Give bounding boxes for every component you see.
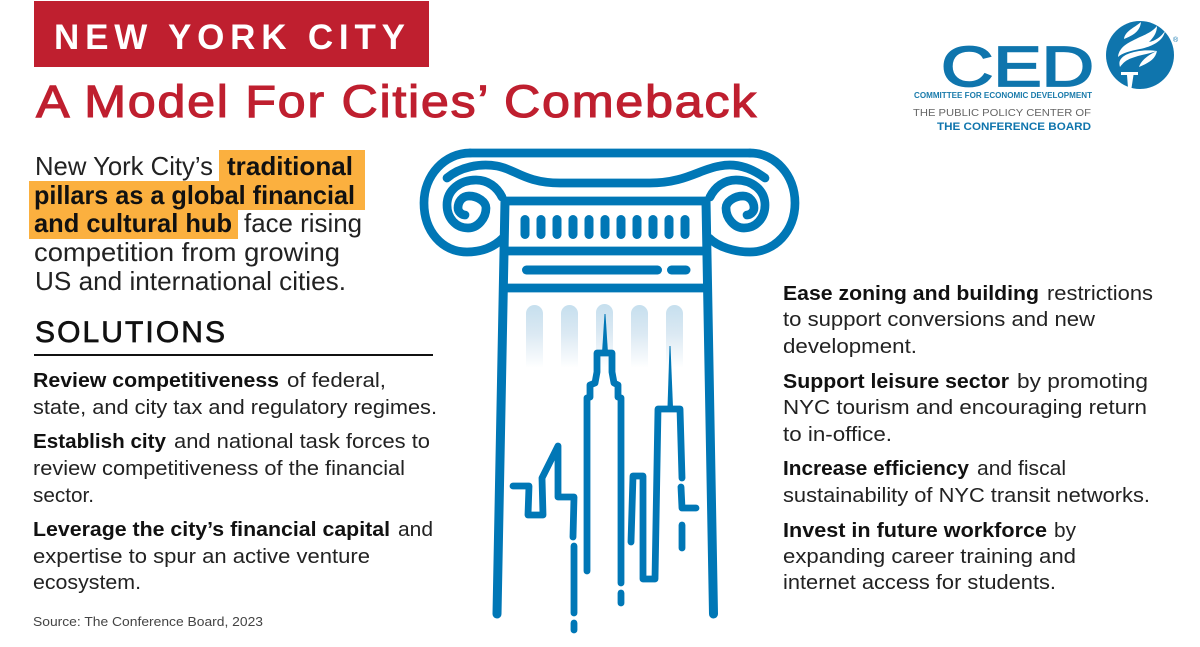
solution: review competitiveness: Review competitiveness	[33, 369, 279, 392]
icon: torch emblem	[1106, 21, 1174, 89]
title banner: New York City	[34, 1, 429, 67]
registered mark: ®	[1173, 36, 1179, 44]
highlight	[29, 150, 365, 239]
solution: support leisure: by promoting	[1017, 370, 1148, 393]
column shaft	[497, 201, 714, 614]
solution: invest in workforce: by	[1054, 519, 1077, 542]
right solutions list	[783, 282, 1153, 594]
intro paragraph with highlight: US and international cities.	[35, 266, 346, 296]
logo: CED	[913, 21, 1179, 133]
logo wordmark: CED	[941, 35, 1094, 99]
solution: invest in workforce: internet access for students.	[783, 571, 1056, 594]
solution: establish city: and national task forces to	[174, 430, 430, 453]
solution: increase efficiency: sustainability of NYC transit networks.	[783, 484, 1150, 507]
intro paragraph with highlight: competition from growing	[34, 237, 340, 267]
solution: leverage capital: expertise to spur an active venture	[33, 545, 370, 568]
solution: invest in workforce: expanding career training and	[783, 545, 1076, 568]
solution: establish city	[33, 430, 430, 507]
solution: support leisure: NYC tourism and encouraging return	[783, 396, 1147, 419]
intro paragraph with highlight	[29, 150, 365, 296]
column frieze details	[520, 215, 690, 274]
solution: ease zoning: development.	[783, 335, 917, 358]
intro paragraph with highlight: face rising	[244, 208, 362, 238]
title banner: New York City: NEW YORK CITY	[54, 18, 405, 57]
logo public policy line: THE PUBLIC POLICY CENTER OF	[913, 107, 1091, 119]
column flutes	[526, 304, 683, 368]
solution: invest in workforce	[783, 519, 1077, 594]
left solutions list	[33, 369, 437, 594]
solution: leverage capital	[33, 518, 433, 594]
solution: increase efficiency	[783, 457, 1150, 507]
solution: leverage capital: Leverage the city’s financial capital	[33, 518, 390, 541]
solution: establish city: review competitiveness of the financial	[33, 457, 405, 480]
solution: support leisure: to in-office.	[783, 423, 892, 446]
heading: solutions: SOLUTIONS	[35, 316, 225, 349]
solution: review competitiveness: of federal,	[287, 369, 386, 392]
solution: review competitiveness	[33, 369, 437, 419]
solution: support leisure	[783, 370, 1148, 446]
solution: leverage capital: and	[398, 518, 433, 541]
skyline spires	[602, 314, 673, 407]
solution: increase efficiency: and fiscal	[977, 457, 1066, 480]
column illustration	[424, 153, 795, 630]
solution: review competitiveness: state, and city tax and regulatory regimes.	[33, 396, 437, 419]
intro paragraph with highlight: traditional	[227, 151, 353, 181]
solution: increase efficiency: Increase efficiency	[783, 457, 970, 480]
source note: Source: The Conference Board, 2023	[33, 615, 263, 629]
solution: ease zoning: to support conversions and new	[783, 308, 1095, 331]
subtitle: A Model For Cities’ Comeback	[36, 76, 758, 127]
solution: ease zoning: Ease zoning and building	[783, 282, 1039, 305]
logo conference board line: THE CONFERENCE BOARD	[937, 121, 1091, 133]
solution: establish city: sector.	[33, 484, 94, 507]
intro paragraph with highlight: pillars as a global financial	[34, 180, 355, 210]
solution: leverage capital: ecosystem.	[33, 571, 141, 594]
solution: invest in workforce: Invest in future workforce	[783, 519, 1047, 542]
skyline	[513, 353, 696, 630]
solution: establish city: Establish city	[33, 430, 167, 453]
column capital	[424, 153, 795, 288]
solution: support leisure: Support leisure sector	[783, 370, 1009, 393]
intro paragraph with highlight: New York City’s	[35, 151, 213, 181]
solution: ease zoning	[783, 282, 1153, 358]
solution: ease zoning: restrictions	[1047, 282, 1153, 305]
logo committee line: COMMITTEE FOR ECONOMIC DEVELOPMENT	[914, 91, 1092, 100]
intro paragraph with highlight: and cultural hub	[34, 208, 232, 238]
